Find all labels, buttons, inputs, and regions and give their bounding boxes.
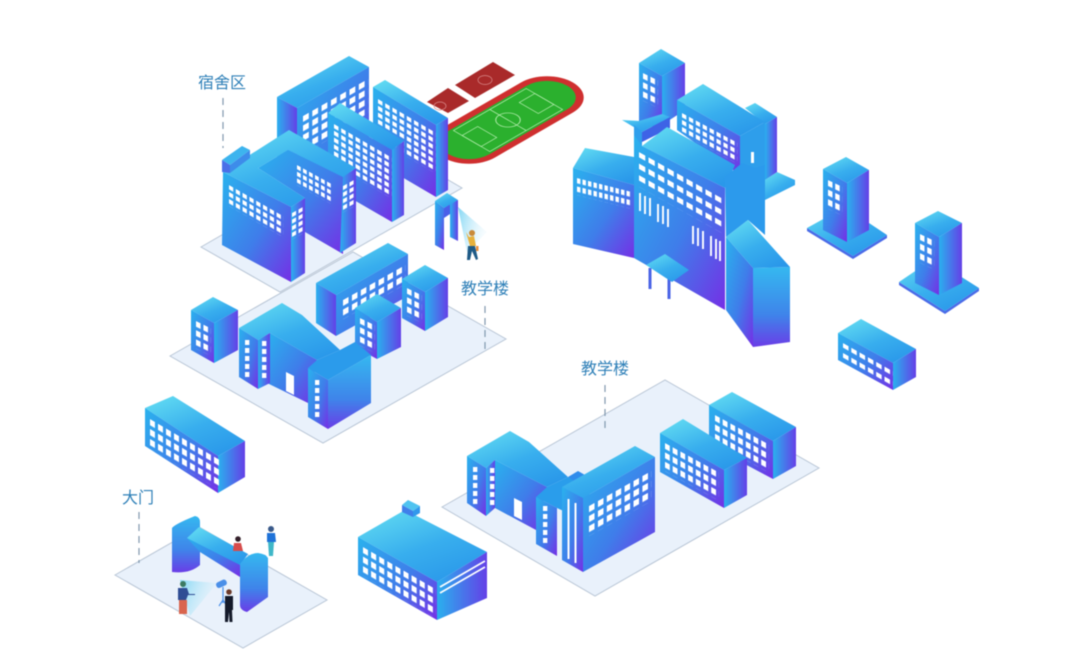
complex left wing	[573, 148, 634, 258]
platform	[442, 380, 819, 596]
label: 大门: 大门	[122, 489, 154, 507]
dormitory right block	[373, 80, 448, 197]
gate left pillar	[172, 516, 200, 572]
dormitory back block	[277, 56, 369, 190]
label: 宿舍区	[198, 74, 246, 148]
box building right	[838, 319, 916, 391]
dormitory middle block	[328, 103, 404, 222]
complex front wing	[726, 220, 790, 347]
security gate	[435, 193, 487, 252]
tower middle	[355, 294, 401, 359]
H-shaped block	[467, 431, 655, 572]
lower-left building	[145, 396, 245, 493]
label: 教学楼 upper	[461, 280, 509, 352]
panel: main complex	[573, 49, 795, 347]
complex entrance canopy	[646, 254, 689, 299]
tower A	[807, 157, 887, 259]
complex pillar	[725, 152, 765, 237]
label: 教学楼 upper: 教学楼	[461, 280, 509, 298]
complex right tower	[745, 103, 777, 180]
camera scan cone	[180, 580, 217, 616]
complex central block	[634, 125, 735, 310]
front block	[660, 419, 747, 508]
tower right	[402, 265, 448, 331]
label: 教学楼 lower: 教学楼	[581, 360, 629, 378]
teaching zone platform	[170, 252, 506, 443]
complex right base	[765, 172, 795, 200]
gate right pillar	[240, 553, 268, 612]
gate beam	[187, 527, 248, 577]
sports courts	[427, 62, 515, 113]
tower B	[899, 211, 979, 314]
dormitory U-shaped block	[222, 130, 356, 282]
long building	[316, 243, 408, 336]
panel: teaching zone one	[170, 243, 506, 443]
label: 宿舍区: 宿舍区	[198, 74, 246, 92]
person in blue	[267, 526, 276, 556]
camera	[215, 579, 228, 606]
dormitory platform	[201, 142, 462, 292]
gate platform	[115, 527, 327, 648]
person at camera left	[178, 581, 195, 614]
lower middle building	[358, 500, 487, 620]
complex back block	[677, 84, 765, 190]
panel: main gate zone	[115, 516, 327, 648]
stadium	[417, 68, 599, 172]
person in red	[233, 536, 243, 551]
panel: dormitory zone	[201, 56, 462, 292]
H-shaped teaching block	[239, 303, 371, 429]
panel: teaching zone two	[442, 380, 819, 596]
person at security gate	[466, 230, 478, 260]
back block	[709, 392, 796, 479]
small tower left	[191, 297, 238, 363]
label: 大门	[122, 489, 154, 563]
person in black	[225, 589, 233, 622]
complex top tower	[622, 49, 685, 142]
